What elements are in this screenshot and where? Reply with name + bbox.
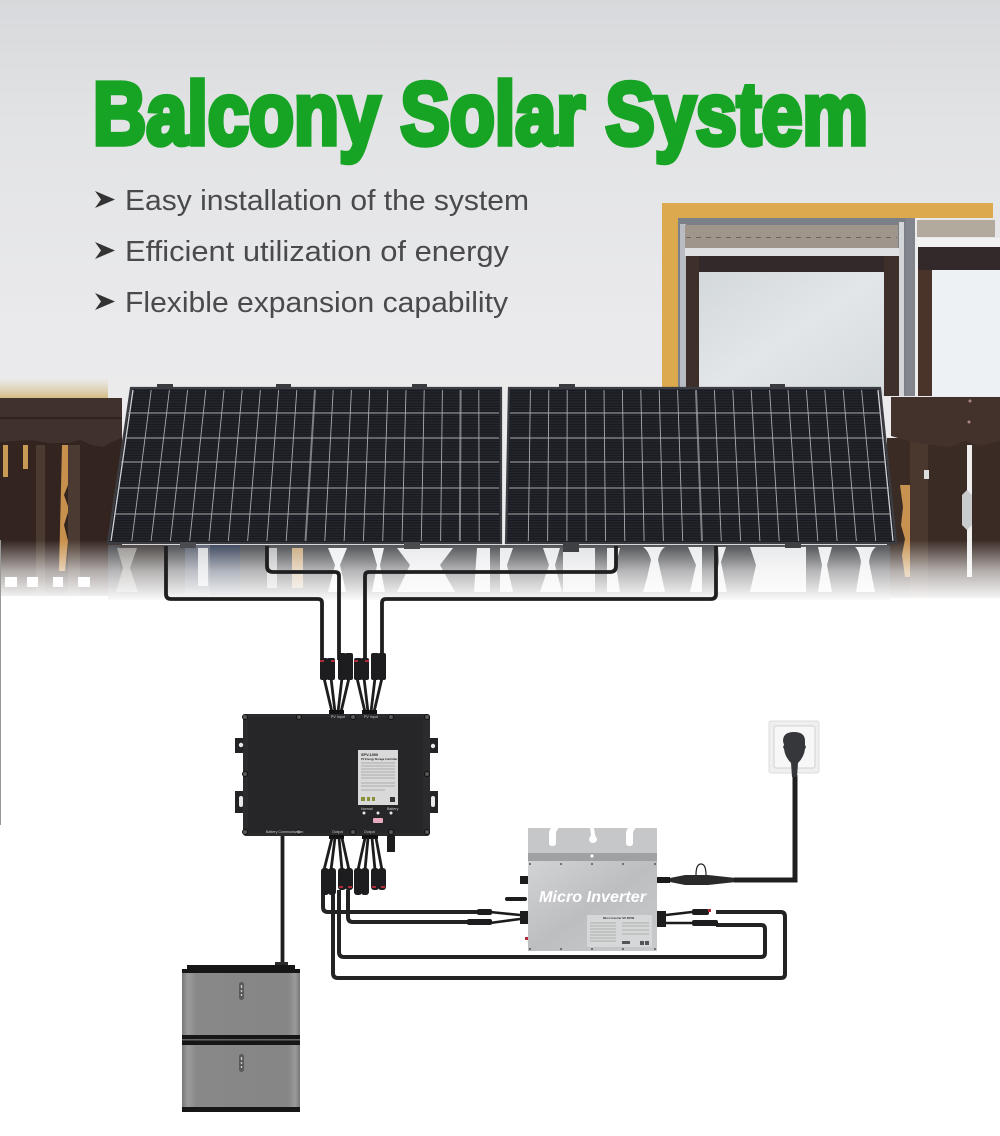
- balusters beneath panels: [108, 545, 890, 600]
- port labels: Battery Communication: [266, 830, 303, 834]
- cables: panels to controller: [166, 546, 716, 660]
- antenna and side ports: [505, 876, 666, 927]
- title: Balcony Solar System: [93, 64, 868, 163]
- port labels: PV Input: [331, 715, 345, 719]
- bullet: flexible expansion: Flexible expansion capability: [125, 287, 509, 319]
- spec label: SPV-1000: [361, 753, 378, 757]
- left balcony railing: [0, 378, 122, 596]
- inverter spec label: Micro Inverter SP-800W: [603, 916, 635, 920]
- PV input connectors: [320, 653, 386, 715]
- AC connector and cable: [657, 775, 795, 885]
- port labels: Battery: [387, 807, 399, 811]
- cables: controller to inverter: [323, 890, 785, 978]
- white fade overlay: [0, 540, 1000, 602]
- port labels: [266, 715, 399, 834]
- port labels: Normal: [361, 807, 373, 811]
- wall socket with plug: [769, 721, 819, 777]
- controller body: [243, 714, 430, 836]
- mounting ears: [235, 738, 438, 813]
- inverter bolts: [529, 863, 656, 950]
- battery indicator: upper: [239, 982, 244, 1000]
- output connectors: [321, 835, 386, 895]
- status LEDs: [362, 812, 392, 814]
- cable: controller to battery: [281, 836, 284, 964]
- battery indicator: lower: [239, 1054, 244, 1072]
- inverter flange: [528, 828, 657, 853]
- screws: [242, 714, 430, 834]
- port labels: PV Input: [364, 715, 378, 719]
- bullet: easy installation: Easy installation of the system: [125, 185, 529, 217]
- inverter spec label: [587, 915, 652, 947]
- energy storage controller: [235, 714, 438, 852]
- solar panel: left: [108, 384, 501, 549]
- spec label: [358, 750, 398, 805]
- port labels: Output: [364, 830, 375, 834]
- background wall: [0, 0, 1000, 610]
- inverter DC connectors: [467, 909, 718, 926]
- right balcony railing: [887, 397, 1000, 598]
- bullet: efficient utilization: Efficient utilization of energy: [125, 236, 510, 268]
- battery stack: [182, 962, 300, 1112]
- solar panel: right: [506, 384, 896, 552]
- mounting holes: [239, 743, 435, 807]
- window: [662, 203, 1000, 396]
- bottom stub: [387, 835, 395, 852]
- inverter body: [528, 861, 657, 951]
- inverter name: Micro Inverter: [539, 889, 647, 906]
- pink button: [373, 818, 383, 823]
- micro inverter: [505, 828, 666, 951]
- port labels: Output: [332, 830, 343, 834]
- spec label: PV Energy Storage Controller: [361, 757, 397, 761]
